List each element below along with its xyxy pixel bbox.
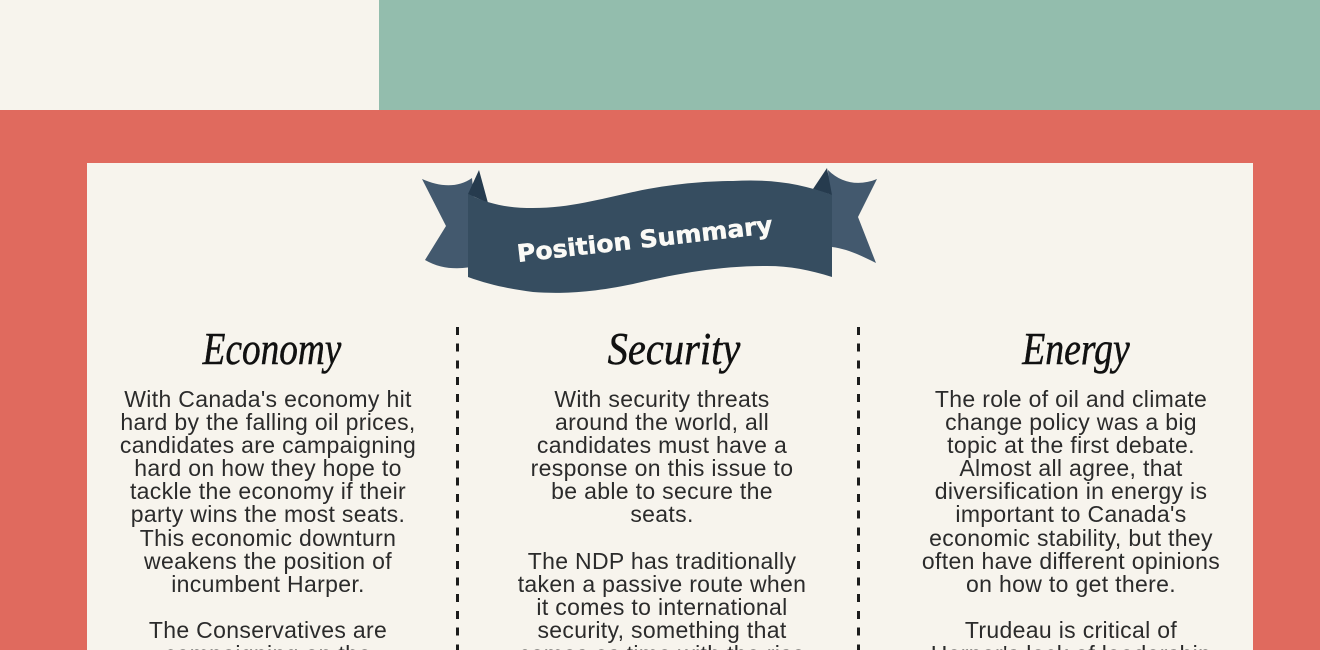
text block: energy: Trudeau is critical of [965,617,1177,643]
text block: economy: The Conservatives are [149,617,387,643]
text block: energy: on how to get there. [966,571,1176,597]
text block: energy: Almost all agree, that [959,455,1183,481]
text block: security: it comes to international [536,594,788,620]
text block: economy: party wins the most seats. [131,501,405,527]
text block: security: be able to secure the [551,478,773,504]
text block: security: seats. [630,501,694,527]
heading: Energy: Energy [1022,323,1130,374]
text block: security: response on this issue to [531,455,793,481]
text block: energy: change policy was a big [945,409,1197,435]
text block: energy: often have different opinions [922,548,1220,574]
heading: Economy: Economy [203,323,341,374]
text block: energy: important to Canada's [955,501,1187,527]
text block: economy: incumbent Harper. [171,571,365,597]
text block: security: With security threats [554,386,770,412]
text block: economy: This economic downturn [140,525,396,551]
ribbon banner: Position Summary [422,168,877,293]
text block: economy: candidates are campaigning [120,432,416,458]
text block: security: security, something that [537,617,787,643]
text block: energy: diversification in energy is [935,478,1207,504]
ribbon banner: Position Summary: Position Summary [516,211,774,268]
text block: energy: economic stability, but they [929,525,1213,551]
cream content panel [87,163,1253,650]
text block: economy: hard on how they hope to [134,455,402,481]
heading: Security: Security [608,323,740,374]
divider: left dashed line [456,327,459,650]
text block: security: around the world, all [555,409,769,435]
divider: right dashed line [857,327,860,650]
text block: security [518,386,806,650]
text block: security: taken a passive route when [518,571,806,597]
text block: economy [120,386,416,650]
text block: economy: hard by the falling oil prices, [120,409,416,435]
text block: economy: With Canada's economy hit [124,386,412,412]
text block: energy: The role of oil and climate [935,386,1207,412]
teal header block [379,0,1320,110]
text block: energy: topic at the first debate. [947,432,1195,458]
text block: economy: weakens the position of [144,548,392,574]
text block: economy: tackle the economy if their [130,478,406,504]
text block: security: The NDP has traditionally [528,548,796,574]
text block: energy [922,386,1220,650]
text block: security: candidates must have a [537,432,787,458]
